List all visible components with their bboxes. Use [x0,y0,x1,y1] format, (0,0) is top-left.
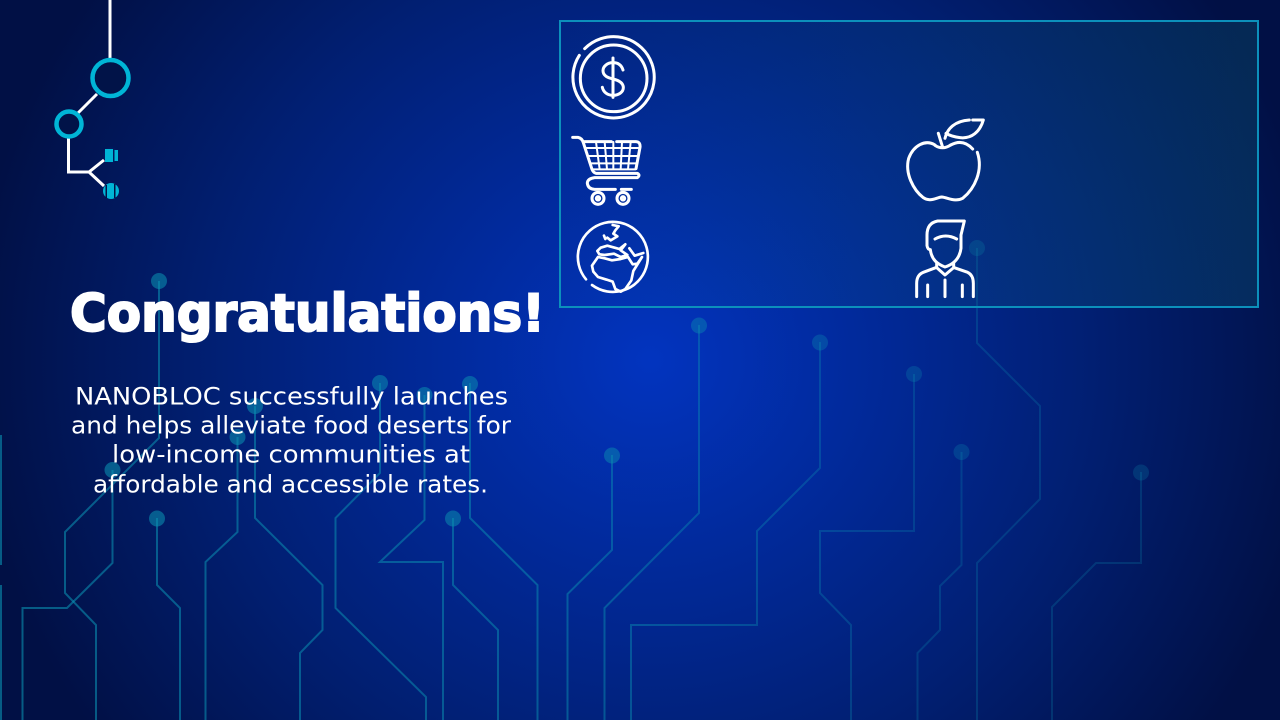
icon: globe [578,222,648,292]
icon: person [917,221,973,297]
body text: NANOBLOC successfully launches [75,382,508,410]
circuit board traces [1,248,1141,720]
body text: and helps alleviate food deserts for [71,412,511,440]
body text: affordable and accessible rates. [93,470,488,498]
icon: shopping cart [573,137,640,204]
body text: low-income communities at [112,440,470,468]
icon: circuit logo [56,0,128,199]
body text [71,382,511,498]
icon: dollar coin [573,37,654,118]
title: Congratulations! [70,284,545,344]
panel: icon box [560,21,1258,307]
icon: apple [908,120,983,200]
circuit board nodes [104,240,1149,526]
